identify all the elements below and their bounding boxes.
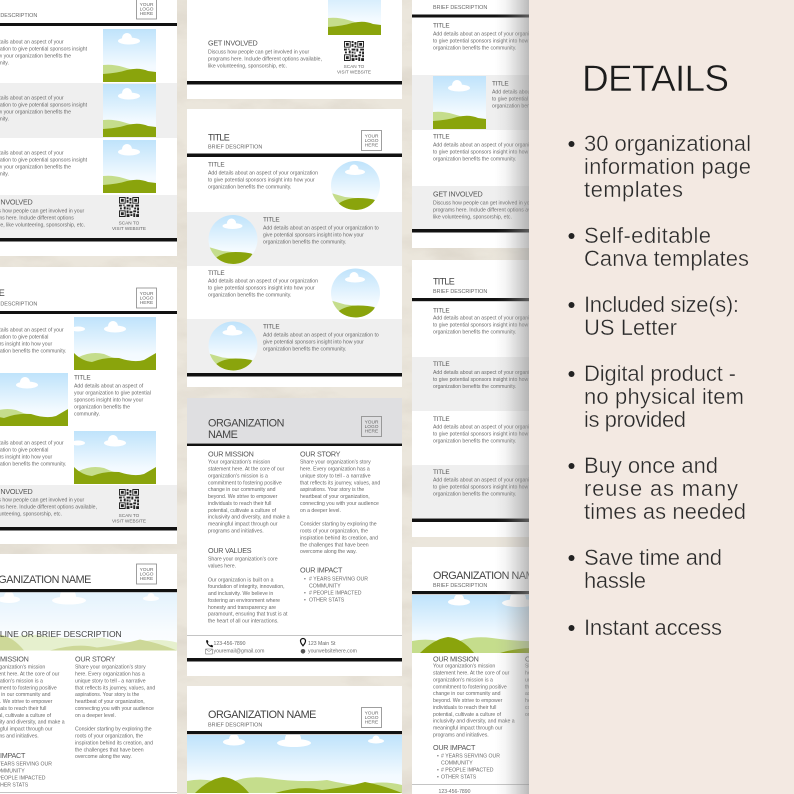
template page: column 2, organization name profile: that reflects its journey, values, and	[300, 480, 380, 486]
template page: column 3, text rows	[412, 260, 627, 537]
template page: column 1, organization name with tagline hero: heartbeat of your organization,	[75, 699, 145, 705]
template page: column 1, wide photos	[0, 267, 177, 544]
template page: column 2, organization name profile: the heart of all our interactions.	[208, 619, 279, 625]
template page: column 3, text rows: organization benefits the community.	[433, 438, 516, 444]
logo placeholder: YOUR	[140, 292, 153, 297]
bullet: digital product: no physical item	[584, 384, 744, 409]
logo placeholder: HERE	[140, 576, 153, 582]
template page: column 2, organization name profile: foundation of integrity, innovation,	[208, 584, 284, 590]
template page: column 3, organization name: potential, cultivate a culture of	[433, 712, 502, 718]
template page: column 1, organization name with tagline hero: Share your organization's story	[75, 665, 146, 671]
bullet: save time	[568, 545, 722, 593]
template page: column 2, organization name profile: OUR MISSION	[208, 450, 254, 458]
template page: column 1, wide photos: organization benefits the	[74, 404, 130, 410]
template page: column 2, organization name profile	[187, 398, 402, 676]
template page: column 3, mixed rows: Add details about an aspect of your organization	[433, 32, 543, 38]
template page: column 2, organization name profile: potential, cultivate a culture of	[208, 508, 277, 514]
row 2: Add details about an aspect of your organization to	[263, 226, 379, 232]
row 3	[208, 268, 380, 318]
template page: column 2, organization name profile: and inclusivity. We believe in	[208, 591, 273, 597]
logo placeholder: YOUR	[365, 420, 378, 426]
row 3: Add details about an aspect of your organization	[208, 279, 318, 285]
template page: column 2, get involved: programs here. Include different options available,	[208, 57, 322, 63]
row 4: give potential sponsors insight into how your	[263, 340, 364, 346]
template page: column 2, circle photos: TITLE	[208, 132, 230, 142]
logo placeholder: LOGO	[140, 296, 154, 302]
template page: column 3, organization name: meaningful impact through our	[433, 726, 503, 732]
template page: column 2, organization name profile: overcome along the way.	[300, 549, 357, 555]
template page: column 3, text rows: TITLE	[433, 276, 455, 286]
template page: column 2, organization name profile: honesty and transparency are	[208, 605, 276, 611]
template page: column 1, organization name with tagline hero	[0, 554, 177, 794]
template page: column 3, mixed rows: like volunteering, sponsorship, etc.	[433, 214, 512, 220]
template page: column 3, text rows: Add details about an aspect of your organization	[433, 478, 543, 484]
template page: column 1, three photos: VISIT WEBSITE	[112, 226, 146, 231]
contact footer: 123 Main St	[308, 641, 336, 647]
template page: column 2, organization name profile: Consider starting by exploring the	[300, 522, 377, 528]
template page: column 3, organization name: OUR STORY	[525, 654, 566, 664]
template page: column 2, organization name profile: # YEARS SERVING OUR	[309, 577, 368, 583]
bullet: digital product: is provided	[584, 407, 686, 432]
template page: column 3, mixed rows	[412, 0, 627, 248]
logo placeholder: LOGO	[140, 6, 154, 12]
template page: column 3, text rows: to give potential sponsors insight into how your	[433, 323, 540, 329]
template page: column 3, organization name: ORGANIZATION NAME	[433, 570, 541, 582]
template page: column 2, organization name profile: here. Every organization has a	[300, 467, 370, 473]
row 3: organization benefits the community.	[208, 292, 291, 298]
row 2: give potential sponsors insight into how your	[263, 233, 364, 239]
template page: column 3, text rows: organization benefits the community.	[433, 330, 516, 336]
template page: column 3, organization name: Your organization's mission	[433, 664, 495, 670]
bullet: templates count: 30 organizational	[584, 131, 751, 156]
template page: column 2, organization name profile: meaningful impact through our	[208, 522, 278, 528]
template page: column 2, organization name profile: aspirations. Your story is the	[300, 487, 364, 493]
template page: column 3, text rows: TITLE	[433, 416, 449, 423]
logo placeholder: HERE	[365, 428, 378, 434]
template page: column 3, organization name: organization's mission is a	[433, 677, 493, 683]
template page: column 3, organization name: on a deeper level.	[525, 712, 566, 718]
template page: column 2, organization name profile: paramount, ensuring that trust is at	[208, 612, 288, 618]
template page: column 1, organization name with tagline hero: here. Every organization has a	[75, 672, 145, 678]
logo placeholder	[136, 288, 156, 308]
row 2	[208, 215, 379, 264]
template page: column 2, organization name profile: inclusivity and diversity, and make a	[208, 515, 290, 521]
template page: column 3, organization name: # PEOPLE IMPACTED	[441, 768, 494, 774]
template page: column 2, organization name with hero	[187, 686, 402, 794]
bullet: size	[568, 292, 739, 340]
row 4: organization benefits the community.	[263, 346, 346, 352]
logo placeholder	[136, 0, 156, 19]
template page: column 1, wide photos: sponsors insight into how your	[74, 398, 143, 404]
bullet: self-editable: Canva templates	[584, 246, 749, 271]
bullet: save time: Save time and	[584, 545, 722, 570]
template page: column 1, organization name with tagline hero: overcome along the way.	[75, 754, 132, 760]
template page: column 2, organization name profile: heartbeat of your organization,	[300, 494, 370, 500]
template page: column 3, mixed rows: organization benefits the community.	[433, 156, 516, 162]
bullet: buy once: times as needed	[584, 499, 746, 524]
icon: phone	[206, 640, 213, 647]
logo placeholder	[362, 130, 382, 150]
template page: column 3, mixed rows: TITLE	[433, 22, 449, 30]
template page: column 3, text rows: organization benefits the community.	[433, 384, 516, 390]
template page: column 3, organization name: commitment to fostering positive	[433, 684, 507, 690]
template page: column 2, organization name profile: beyond. We strive to empower	[208, 494, 278, 500]
template page: column 2, organization name profile: values here.	[208, 564, 236, 570]
bullet: instant access: Instant access	[584, 615, 722, 640]
template page: column 3, organization name: inclusivity and diversity, and make a	[433, 719, 515, 725]
template page: column 1, organization name with tagline hero: unique story to tell - a narrative	[75, 678, 146, 684]
row 4	[208, 322, 379, 370]
logo placeholder: HERE	[140, 300, 153, 306]
template page: column 1, wide photos: SCAN TO	[119, 513, 139, 518]
template page: column 3, text rows: to give potential sponsors insight into how your	[433, 431, 540, 437]
template page: column 2, organization name profile: organization's mission is a	[208, 473, 268, 479]
logo placeholder: LOGO	[140, 572, 154, 578]
template page: column 3, organization name: •	[437, 754, 439, 760]
template page: column 3, organization name: aspirations. Your story is the	[525, 691, 589, 697]
template page: column 1, organization name with tagline hero: inspiration behind its creation, and	[75, 740, 153, 746]
template page: column 3, mixed rows: to give potential sponsors insight into how your	[433, 150, 540, 156]
template page: column 3, mixed rows: organization benefits the community.	[492, 103, 575, 109]
template page: column 2, get involved: VISIT WEBSITE	[337, 69, 371, 74]
template page: column 2, organization name profile: on a deeper level.	[300, 508, 341, 514]
contact footer: 123-456-7890	[214, 641, 246, 647]
template page: column 3, organization name: beyond. We strive to empower	[433, 698, 503, 704]
template page: column 2, organization name profile: commitment to fostering positive	[208, 480, 282, 486]
logo placeholder: LOGO	[365, 715, 379, 721]
template page: column 2, organization name profile: OUR VALUES	[208, 546, 252, 555]
template page: column 3, mixed rows: GET INVOLVED	[433, 190, 483, 198]
row 3: to give potential sponsors insight into how your	[208, 286, 315, 292]
template page: column 1, organization name with tagline hero: connecting you with your audience	[75, 706, 154, 712]
template page: column 1, organization name with tagline hero: on a deeper level.	[75, 713, 116, 719]
template page: column 2, organization name profile: Your organization's mission	[208, 460, 270, 466]
template page: column 2, organization name profile: the challenges that have been	[300, 542, 369, 548]
template page: column 3, organization name: # YEARS SERVING OUR	[441, 754, 500, 760]
template page: column 2, circle photos	[187, 109, 402, 387]
row 1: Add details about an aspect of your organization	[208, 171, 318, 177]
bullet: templates count: information page	[584, 154, 751, 179]
bullet: buy once: reuse as many	[584, 476, 738, 501]
bullet: buy once	[568, 453, 746, 524]
template page: column 2, organization name profile: OUR IMPACT	[300, 566, 343, 574]
logo placeholder: LOGO	[365, 138, 379, 144]
logo placeholder	[136, 564, 156, 584]
template page: column 1, organization name with tagline hero: Consider starting by exploring the	[75, 727, 152, 733]
template page: column 2, organization name profile: •	[304, 597, 306, 603]
contact footer: yourwebsitehere.com	[308, 649, 357, 655]
template page: column 2, organization name profile: individuals to reach their full	[208, 501, 271, 507]
template page: column 3, mixed rows: Add details about an aspect of your organization	[492, 90, 602, 96]
template page: column 2, get involved	[187, 0, 402, 99]
faded hero image	[0, 588, 177, 650]
template page: column 3, organization name: OTHER STATS	[441, 774, 477, 780]
row 1: TITLE	[208, 162, 224, 168]
template page: column 2, organization name profile: statement here. At the core of our	[208, 467, 285, 473]
row 1	[208, 161, 380, 210]
template page: column 3, text rows: BRIEF DESCRIPTION	[433, 289, 487, 295]
icon: globe	[301, 649, 305, 654]
template page: column 2, organization name profile: inspiration behind its creation, and	[300, 535, 378, 541]
template page: column 2, organization name with hero: BRIEF DESCRIPTION	[208, 722, 262, 728]
heading: DETAILS	[582, 58, 729, 99]
template page: column 3, mixed rows: Add details about an aspect of your organization	[433, 143, 543, 149]
template page: column 3, text rows: Add details about an aspect of your organization	[433, 316, 543, 322]
template page: column 3, organization name: OUR IMPACT	[433, 743, 476, 752]
bullet: templates count	[568, 131, 751, 202]
logo placeholder: YOUR	[140, 568, 153, 573]
template page: column 3, mixed rows: BRIEF DESCRIPTION	[433, 5, 487, 11]
template page: column 3, organization name	[412, 547, 627, 794]
template page: column 3, organization name: unique story to tell - a narrative	[525, 677, 596, 683]
template page: column 2, organization name profile: # PEOPLE IMPACTED	[309, 590, 362, 596]
template page: column 1, three photos	[0, 0, 177, 256]
template page: column 2, get involved: Discuss how people can get involved in your	[208, 50, 309, 56]
template page: column 3, text rows: organization benefits the community.	[433, 492, 516, 498]
logo placeholder: HERE	[365, 142, 378, 148]
template page: column 1, wide photos: TITLE	[74, 374, 90, 382]
template page: column 3, organization name: Share your organization's story	[525, 664, 596, 670]
template page: column 2, organization name profile: OUR STORY	[300, 450, 341, 458]
bullet: size: Included size(s):	[584, 292, 739, 317]
bullet: self-editable: Self-editable	[584, 223, 711, 248]
template page: column 1, organization name with tagline hero: the challenges that have been	[75, 747, 144, 753]
template page: column 2, organization name profile: unique story to tell - a narrative	[300, 473, 371, 479]
template page: column 2, get involved: like volunteering, sponsorship, etc.	[208, 64, 287, 70]
template page: column 3, mixed rows: to give potential sponsors insight into how your	[433, 39, 540, 45]
details sidebar	[529, 0, 794, 794]
template page: column 3, organization name: programs and initiatives.	[433, 732, 489, 738]
row 4: TITLE	[263, 324, 279, 330]
template page: column 2, organization name profile: •	[304, 577, 306, 583]
page-fold shadow	[495, 0, 530, 794]
template page: column 3, mixed rows: programs here. Include different options available,	[433, 208, 547, 214]
template page: column 3, text rows: to give potential sponsors insight into how your	[433, 377, 540, 383]
template page: column 2, get involved: GET INVOLVED	[208, 38, 258, 48]
template page: column 3, organization name: BRIEF DESCRIPTION	[433, 583, 487, 589]
template page: column 3, mixed rows: TITLE	[433, 134, 449, 140]
icon: pin	[300, 638, 306, 646]
contact footer	[206, 638, 357, 655]
template page: column 2, organization name profile: roots of your organization, the	[300, 528, 368, 534]
template page: column 3, mixed rows: Discuss how people can get involved in your	[433, 201, 534, 207]
row 2: organization benefits the community.	[263, 240, 346, 246]
bullet: self-editable	[568, 223, 749, 271]
template page: column 2, get involved: SCAN TO	[344, 64, 364, 69]
template page: column 3, organization name: •	[437, 768, 439, 774]
template page: column 1, wide photos: VISIT WEBSITE	[112, 518, 146, 523]
template page: column 3, mixed rows: organization benefits the community.	[433, 46, 516, 52]
template page: column 2, circle photos: BRIEF DESCRIPTION	[208, 144, 262, 150]
template page: column 3, text rows: TITLE	[433, 469, 449, 476]
template page: column 2, organization name profile: programs and initiatives.	[208, 528, 264, 534]
template page: column 1, organization name with tagline hero: OUR STORY	[75, 654, 116, 664]
icon: envelope	[206, 649, 212, 654]
bullet: digital product: Digital product -	[584, 361, 736, 386]
template page: column 3, text rows: Add details about an aspect of your organization	[433, 370, 543, 376]
template page: column 1, organization name with tagline hero: that reflects its journey, values, and	[75, 685, 155, 691]
logo placeholder	[362, 416, 382, 436]
logo placeholder: YOUR	[140, 3, 153, 8]
template page: column 2, organization name profile: OTHER STATS	[309, 597, 345, 603]
template page: column 3, mixed rows: to give potential sponsors insight into how your	[492, 96, 599, 102]
template page: column 3, organization name: that reflects its journey, values, and	[525, 684, 605, 690]
bullet: size: US Letter	[584, 315, 677, 340]
template page: column 1, wide photos: community.	[74, 411, 100, 417]
template page: column 3, text rows: TITLE	[433, 361, 449, 368]
template page: column 2, organization name profile: COMMUNITY	[309, 584, 341, 590]
template page: column 3, text rows: TITLE	[433, 308, 449, 314]
template page: column 3, organization name: •	[437, 774, 439, 780]
row 1: to give potential sponsors insight into how your	[208, 178, 315, 184]
template page: column 1, organization name with tagline hero: aspirations. Your story is the	[75, 692, 139, 698]
template page: column 2, organization name profile: Share your organization's core	[208, 557, 278, 563]
template page: column 2, organization name profile: ORGANIZATION	[208, 418, 284, 430]
template page: column 2, organization name profile: NAME	[208, 429, 238, 441]
template page: column 3, organization name: COMMUNITY	[441, 761, 473, 767]
template page: column 2, organization name profile: connecting you with your audience	[300, 501, 379, 507]
template page: column 3, organization name: connecting you with your audience	[525, 705, 604, 711]
template page: column 3, organization name: here. Every organization has a	[525, 671, 595, 677]
row 4: Add details about an aspect of your organization to	[263, 333, 379, 339]
logo placeholder: YOUR	[365, 712, 378, 716]
row 3: TITLE	[208, 270, 224, 277]
template page: column 3, organization name: individuals to reach their full	[433, 705, 496, 711]
template page: column 2, organization name with hero: ORGANIZATION NAME	[208, 709, 316, 721]
template page: column 3, text rows: to give potential sponsors insight into how your	[433, 485, 540, 491]
bullet: buy once: Buy once and	[584, 453, 718, 478]
template page: column 2, organization name profile: change in our community and	[208, 487, 276, 493]
bullet: save time: hassle	[584, 568, 646, 593]
logo placeholder: HERE	[365, 720, 378, 726]
bullet: templates count: templates	[584, 177, 683, 202]
template page: column 3, mixed rows: TITLE	[492, 80, 508, 88]
bullet: digital product	[568, 361, 744, 432]
template page: column 3, organization name: statement here. At the core of our	[433, 671, 510, 677]
contact footer: youremail@gmail.com	[214, 649, 264, 655]
row 1: organization benefits the community.	[208, 184, 291, 190]
template page: column 1, three photos: SCAN TO	[119, 220, 139, 225]
template page: column 2, organization name profile: Share your organization's story	[300, 460, 371, 466]
logo placeholder: HERE	[140, 11, 153, 17]
template page: column 3, organization name: OUR MISSION	[433, 654, 479, 664]
template page: column 1, wide photos: your organization to give potential	[74, 391, 151, 397]
template page: column 1, organization name with tagline hero: roots of your organization, the	[75, 734, 143, 740]
template page: column 3, organization name: heartbeat of your organization,	[525, 698, 595, 704]
template page: column 3, organization name: change in our community and	[433, 691, 501, 697]
logo placeholder: YOUR	[365, 134, 378, 140]
template page: column 1, wide photos: Add details about an aspect of	[74, 384, 143, 390]
logo placeholder	[362, 708, 382, 728]
template page: column 2, organization name profile: fostering an environment where	[208, 598, 280, 604]
logo placeholder: LOGO	[365, 424, 379, 430]
template page: column 3, text rows: Add details about an aspect of your organization	[433, 424, 543, 430]
template page: column 2, organization name profile: •	[304, 590, 306, 596]
row 2: TITLE	[263, 216, 279, 224]
template page: column 2, organization name profile: Our organization is built on a	[208, 577, 274, 583]
